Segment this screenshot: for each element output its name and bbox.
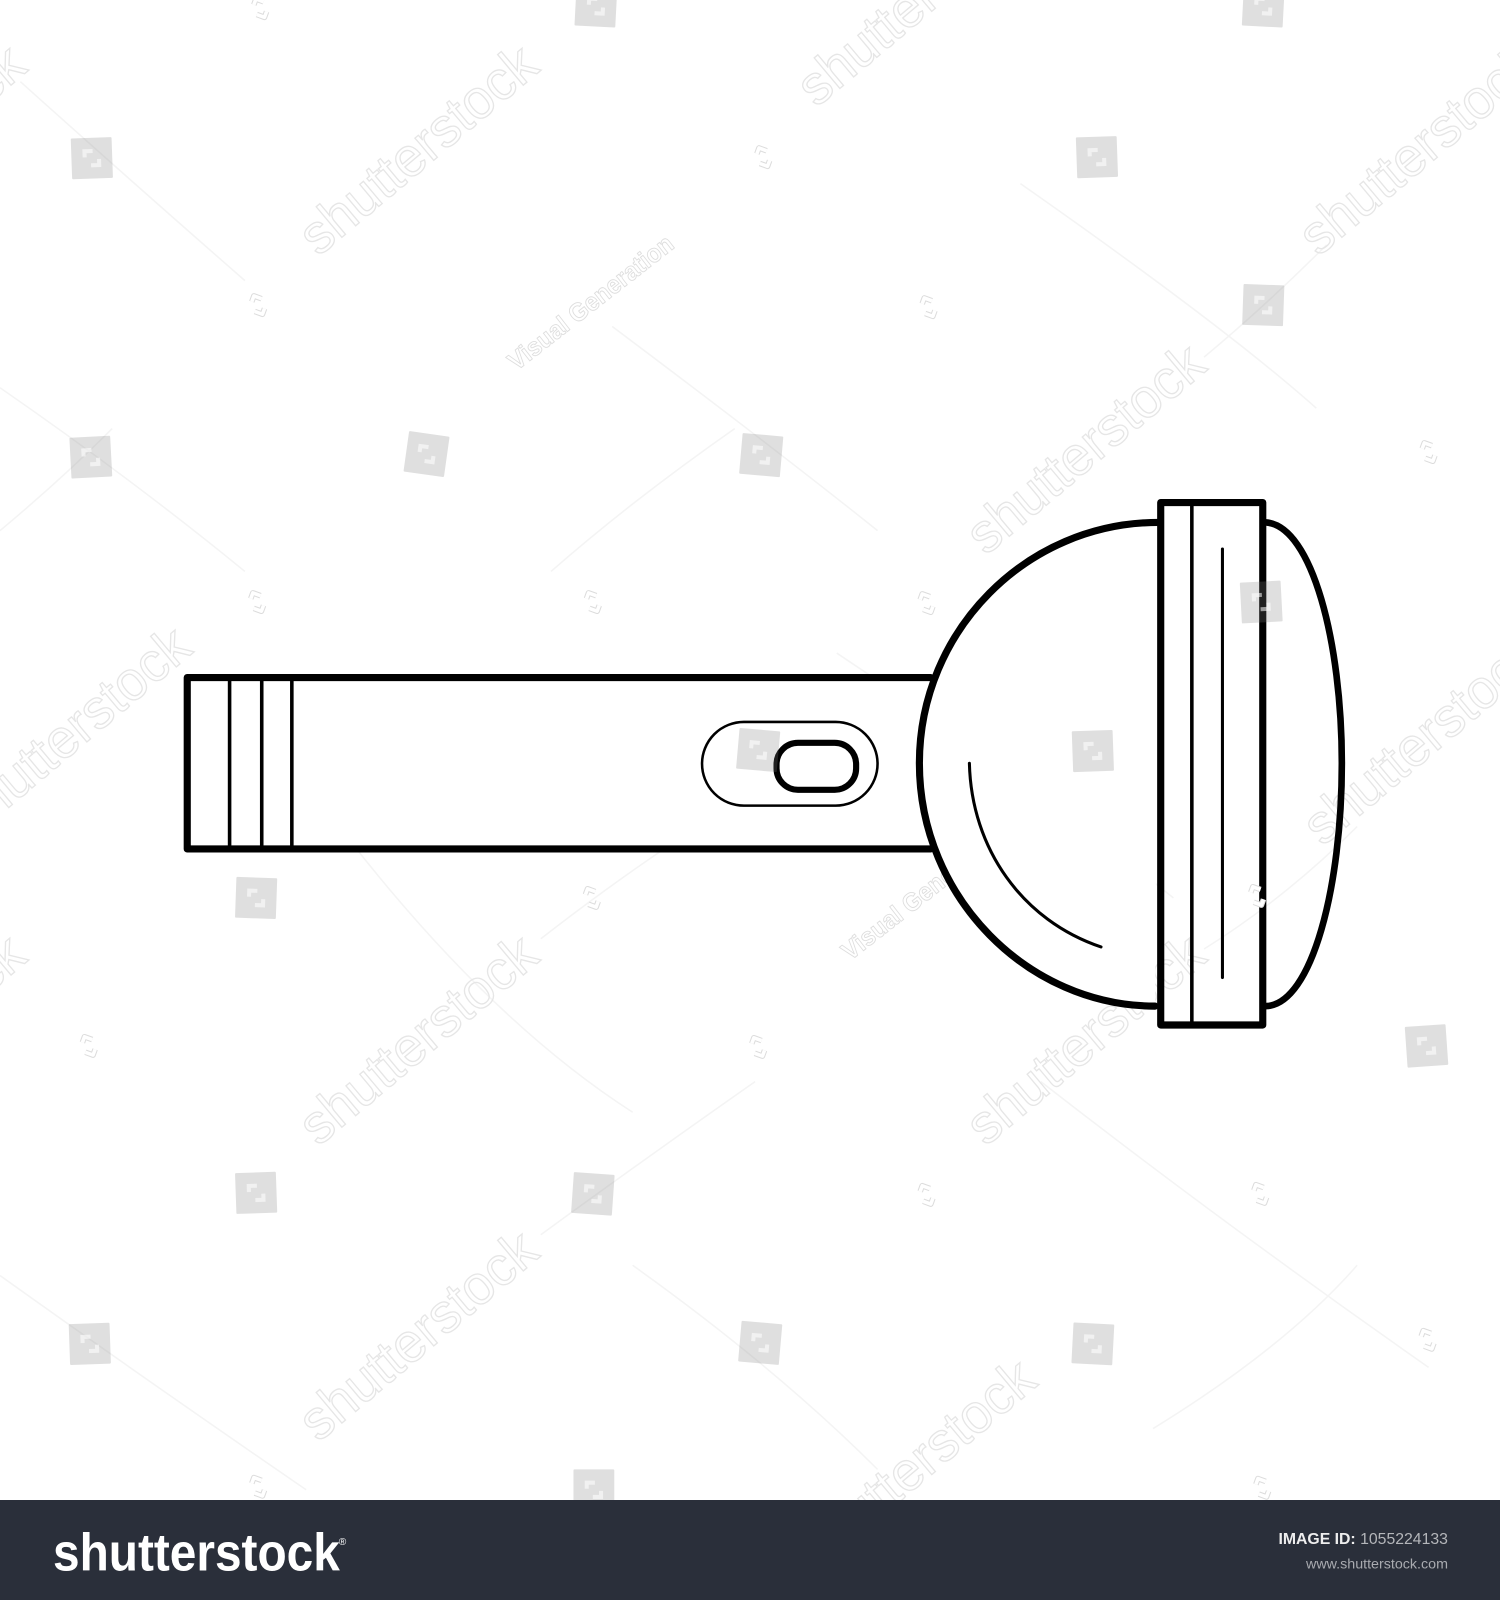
bezel highlight (1221, 549, 1224, 978)
website url: www.shutterstock.com (1305, 1556, 1448, 1572)
bezel inner lines (1190, 502, 1194, 1024)
icon: flashlight (187, 502, 1342, 1025)
watermark: Visual Generation outlined labels (343, 230, 1013, 966)
watermark: Visual Generation outlined labels: Visual Generation (836, 819, 1013, 966)
watermark: shutterstock outlined logotypes: shutterstock (784, 1346, 1047, 1581)
footer logo registered mark: ® (339, 1537, 347, 1548)
flashlight head dome (919, 522, 1158, 1006)
watermark: shutterstock outlined logotypes: shutterstock (286, 1217, 549, 1452)
lens (1266, 522, 1342, 1006)
watermark: Visual Generation outlined labels: Visual Generation (343, 673, 519, 819)
handle grip lines (230, 678, 292, 849)
footer bar (0, 1500, 1500, 1600)
watermark: shutterstock outlined logotypes: shutterstock (954, 331, 1217, 565)
footer logo: shutterstock: shutterstock (53, 1523, 340, 1582)
bezel ring (1161, 503, 1263, 1025)
watermark: shutterstock outlined logotypes: shutterstock (286, 32, 549, 266)
dome highlight (969, 763, 1101, 947)
image id: IMAGE ID: 1055224133 (1278, 1531, 1448, 1548)
watermark: shutterstock outlined logotypes: shutterstock (286, 921, 549, 1156)
flashlight handle (187, 678, 931, 849)
slide switch knob (777, 743, 856, 790)
watermark: Visual Generation outlined labels: Visual Generation (503, 230, 679, 376)
watermark: shutterstock outlined logotypes: shutterstock (954, 921, 1217, 1156)
slide switch housing (702, 722, 878, 806)
